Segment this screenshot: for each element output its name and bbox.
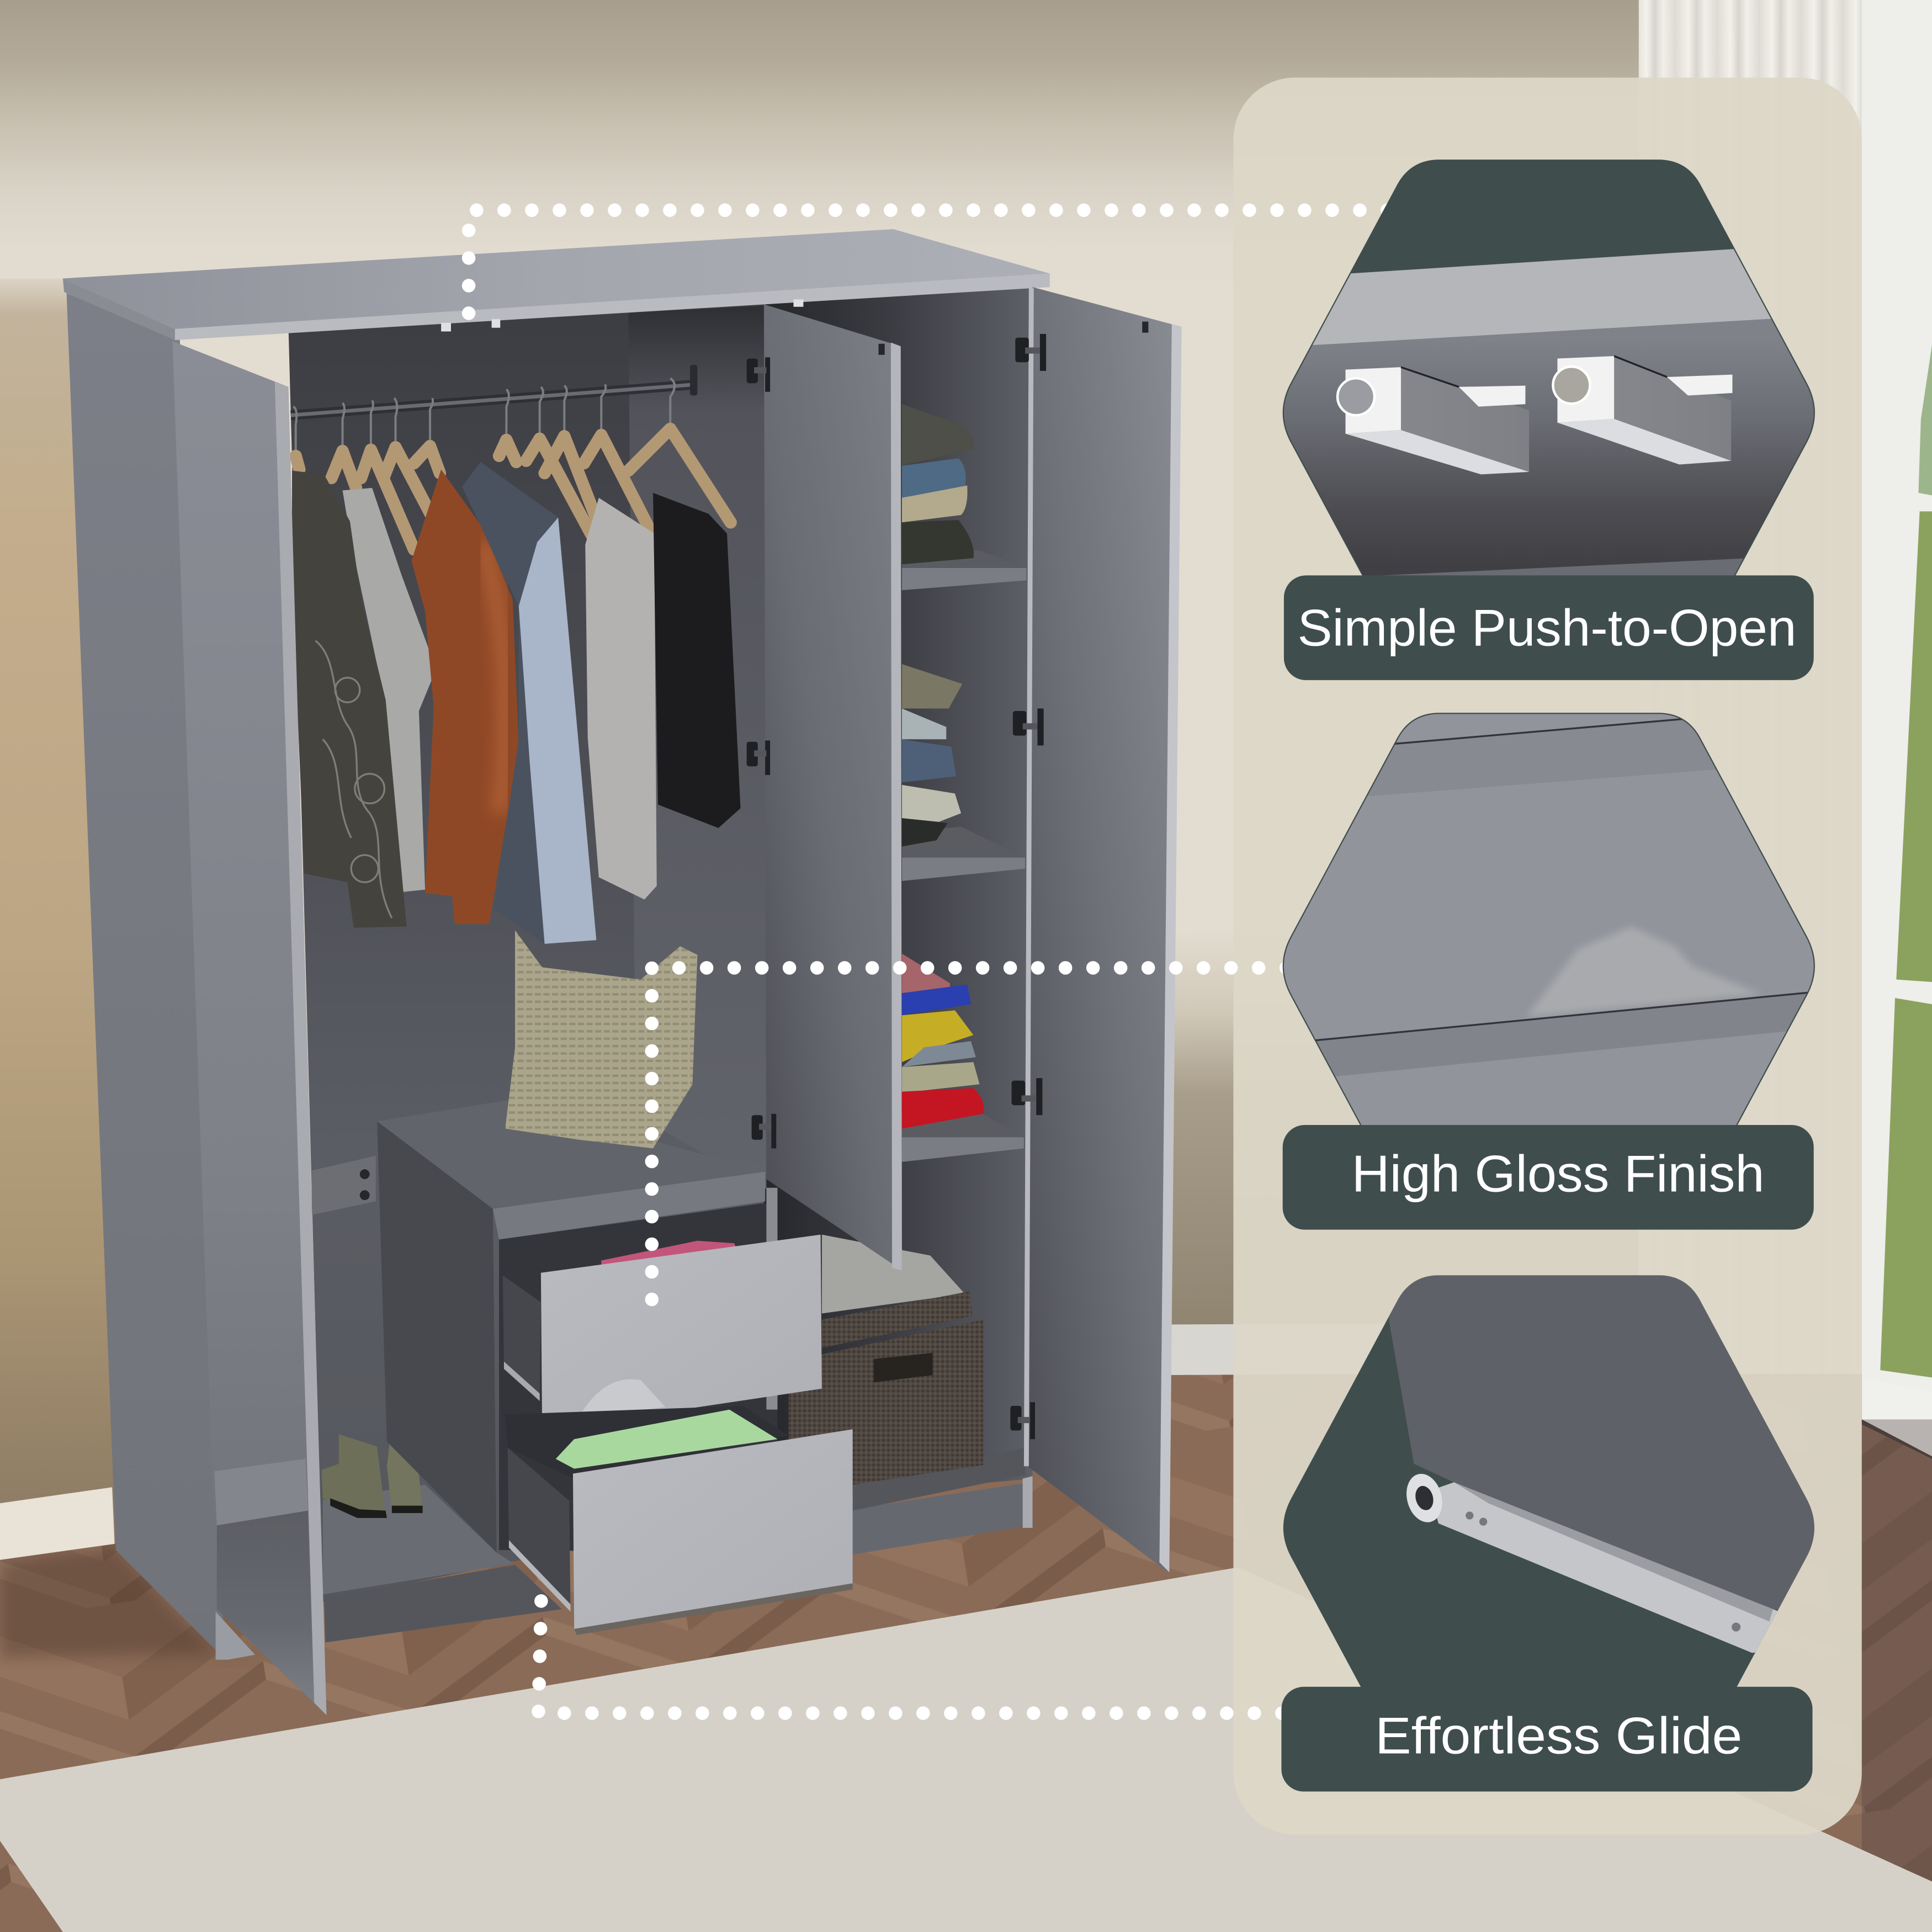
wardrobe back interior (288, 293, 789, 1602)
wardrobe plinth corner (216, 1612, 255, 1660)
yellow garment (293, 579, 313, 747)
unit opening (499, 1201, 777, 1552)
plinth right strip (1023, 1476, 1033, 1528)
hanging rail (291, 365, 697, 415)
wardrobe side panel (67, 293, 224, 1658)
wall bracket (312, 1156, 376, 1215)
plinth right (850, 1484, 1023, 1555)
boots (322, 1424, 423, 1518)
label: glide (1281, 1687, 1812, 1792)
latch 1 (1337, 367, 1529, 474)
wardrobe top (63, 229, 1050, 340)
icon: drawer slide roller (1402, 1470, 1740, 1632)
black garment (653, 493, 741, 828)
hanging clothes (292, 462, 741, 944)
plinth left (324, 1565, 562, 1642)
dotted connector: push-to-open (469, 210, 1389, 314)
right compartment back (764, 286, 1033, 1503)
unit front rail (493, 1172, 765, 1240)
shelves (853, 548, 1026, 1511)
dotted connector: glide (538, 1601, 1283, 1713)
hanger hooks (293, 378, 675, 452)
wooden hangers (296, 429, 731, 550)
wardrobe floor (323, 1485, 514, 1594)
blankets (822, 1235, 965, 1313)
drawer 1 (503, 1235, 822, 1431)
icon: push latches (1337, 356, 1732, 474)
light grey shirt (585, 498, 657, 899)
unit side (377, 1121, 497, 1552)
hexagon: push-to-open detail (1283, 160, 1815, 575)
label: high gloss (1283, 1125, 1814, 1230)
folded clothes lower shelf (902, 954, 984, 1129)
dotted connector: gloss finish (652, 968, 1289, 1299)
wicker basket back (822, 1291, 972, 1348)
drawer 2 (505, 1406, 853, 1635)
paisley coat (292, 471, 407, 928)
handbag (505, 930, 697, 1148)
door latches (441, 299, 1148, 355)
leather jacket (412, 469, 519, 924)
label: push-to-open: Simple Push-to-Open (1297, 599, 1796, 657)
drawer unit (377, 1100, 777, 1552)
door hinges (747, 334, 1046, 1439)
features panel (1233, 78, 1862, 1835)
label: glide: Effortless Glide (1375, 1706, 1742, 1764)
partition strip (766, 1188, 777, 1410)
folded clothes top shelf (902, 404, 974, 564)
label: high gloss: High Gloss Finish (1352, 1144, 1764, 1202)
latch 2 (1553, 356, 1732, 465)
unit top (377, 1100, 765, 1209)
hexagon: high gloss detail (1283, 713, 1815, 1125)
hexagon: glide detail (1283, 1275, 1814, 1687)
inner partition (628, 306, 766, 1189)
wardrobe (63, 229, 1182, 1715)
left door (172, 341, 327, 1715)
folded clothes middle shelf (902, 664, 962, 846)
middle door (764, 304, 902, 1270)
grey knit shirt (343, 488, 436, 892)
label: push-to-open (1284, 575, 1814, 680)
wicker basket front (789, 1320, 983, 1485)
right door (1024, 287, 1182, 1572)
blue shirt (462, 462, 596, 944)
